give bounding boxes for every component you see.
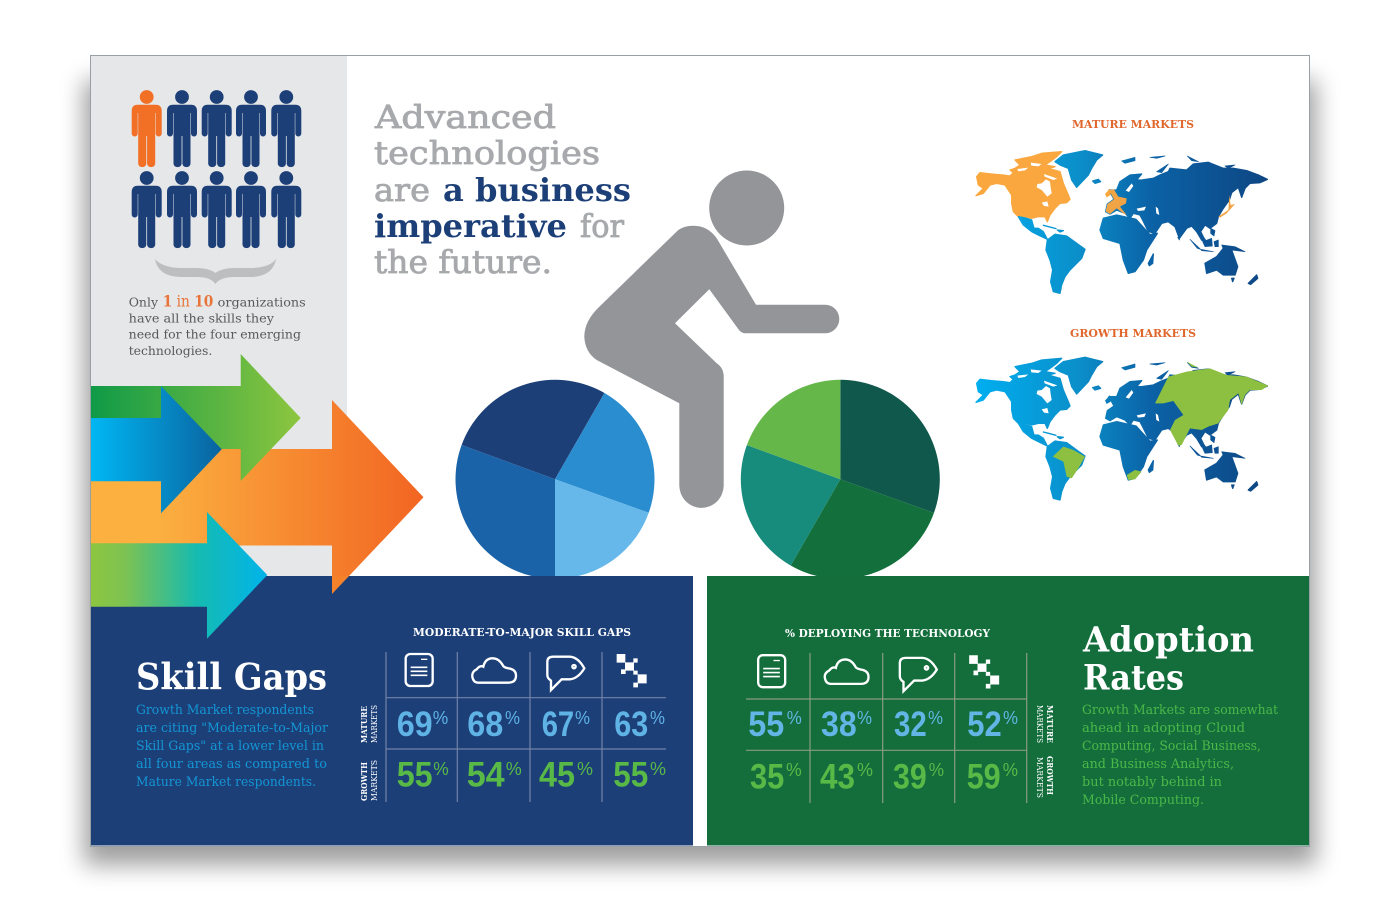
stats: mature markets skill gaps: 67 [542,705,574,744]
panel: grey sidebar [91,56,347,576]
text block: 1 in 10: have all the skills they [129,310,275,326]
arrow: blue [91,386,222,513]
text block: 1 in 10: organizations [218,295,306,310]
icon: cyclist [584,170,839,508]
heading: main headline: the future. [374,243,552,281]
chart title: deployment table: % DEPLOYING THE TECHNOLOGY [785,626,991,640]
heading: growth markets: GROWTH MARKETS [1070,326,1196,340]
stats: mature markets deployment: 55 [748,705,784,744]
stats: mature markets deployment: % [928,708,943,728]
table grid: skill gaps [386,652,666,802]
arrow: orange head over panel [332,576,349,594]
stats: mature markets deployment: % [857,708,872,728]
highlight: Russia, China, India [1155,362,1268,446]
heading: adoption rates: Rates [1083,658,1184,698]
panel: skill gaps [91,576,693,846]
arrow: teal [91,512,267,639]
highlight: Brazil [1053,447,1085,478]
highlight: Japan [1218,195,1235,218]
text block: 1 in 10: Only [129,295,159,310]
stats: growth markets skill gaps: 45 [539,756,575,795]
row labels: deployment: GROWTH [1044,756,1054,795]
highlight: Europe [1106,189,1127,215]
text block: 1 in 10: technologies. [129,343,212,358]
stats: growth markets deployment: % [1003,760,1018,780]
arrow: orange [91,400,424,594]
stats: mature markets deployment: % [787,708,802,728]
stats: growth markets deployment: % [929,760,944,780]
stats: mature markets skill gaps [397,705,665,744]
text block: adoption body [1082,703,1279,808]
row labels: skill gaps [360,705,380,801]
icons: technology row [758,655,999,691]
text block: skill gaps body: all four areas as compared to [136,757,327,772]
stats: mature markets skill gaps: % [650,708,665,728]
stats: growth markets skill gaps [397,756,666,795]
icon: brace [155,259,276,284]
stats: growth markets deployment: % [786,760,802,780]
row labels: deployment: MARKETS [1034,757,1044,798]
text block: 1 in 10: 1 in 10 [163,292,213,311]
chart title: skill gaps table: MODERATE-TO-MAJOR SKILL GAPS [413,625,631,639]
text block: adoption body: Growth Markets are somewhat [1082,703,1279,718]
stats: mature markets skill gaps: % [433,708,448,728]
row labels: skill gaps: GROWTH [360,762,370,801]
text block: 1 in 10: need for the four emerging [129,326,301,342]
arrow: green top [91,354,301,481]
chart: green pie wheel [740,380,940,576]
stats: growth markets deployment: 39 [893,757,927,796]
stats: growth markets skill gaps: % [650,759,666,779]
text block: skill gaps body: Growth Market respondents [136,703,314,718]
text block: skill gaps body: Mature Market respondents. [136,775,316,790]
heading: main headline: for [580,207,625,245]
row labels: skill gaps: MATURE [360,706,370,743]
heading: adoption rates: Adoption [1082,620,1254,660]
stats: mature markets deployment: % [1003,708,1018,728]
heading: main headline: technologies [374,134,600,172]
text block: skill gaps body: are citing "Moderate-to-Major [136,721,329,736]
heading: main headline [374,98,631,281]
row labels: deployment [1034,705,1054,798]
text block: adoption body: but notably behind in [1082,775,1223,790]
stats: mature markets deployment: 52 [967,705,1002,744]
heading: main headline: are [374,171,430,209]
stats: growth markets skill gaps: % [577,759,593,779]
stats: growth markets deployment: 59 [967,757,1001,796]
text block: adoption body: Computing, Social Business, [1082,739,1261,754]
heading: skill gaps: Skill Gaps [136,656,327,698]
map: mature markets [976,151,1267,293]
stats: mature markets skill gaps: 68 [467,705,503,744]
stats: mature markets deployment [748,705,1018,744]
stats: growth markets skill gaps: % [506,759,522,779]
stats: growth markets deployment: % [857,760,873,780]
row labels: deployment: MARKETS [1034,705,1044,743]
chart: blue pie wheel [456,380,654,576]
highlight: South Africa [1127,470,1142,480]
drop shadow [84,80,1316,865]
icon: people row [132,90,301,248]
heading: main headline: a business [443,171,631,209]
stats: mature markets skill gaps: 69 [397,705,433,744]
heading: main headline: Advanced [374,98,556,136]
table grid: deployment [746,653,1027,803]
text block: adoption body: Mobile Computing. [1082,793,1204,808]
text block: 1 in 10 [129,292,306,358]
page frame [90,56,1310,846]
stats: growth markets deployment: 35 [750,757,784,796]
stats: growth markets skill gaps: % [433,759,449,779]
stats: mature markets deployment: 38 [821,705,857,744]
stats: growth markets skill gaps: 55 [397,756,433,795]
stats: mature markets deployment: 32 [894,705,927,744]
stats: growth markets deployment: 43 [820,757,855,796]
row labels: skill gaps: MARKETS [370,705,380,743]
text block: adoption body: ahead in adopting Cloud [1082,721,1245,736]
icons: technology row [406,654,647,690]
heading: main headline: imperative [374,207,567,245]
heading: adoption rates [1082,620,1254,698]
text block: skill gaps body: Skill Gaps" at a lower level in [136,739,325,754]
stats: mature markets skill gaps: % [505,708,520,728]
row labels: skill gaps: MARKETS [370,760,380,801]
stats: growth markets deployment [750,757,1018,796]
text block: adoption body: and Business Analytics, [1082,757,1234,772]
stats: growth markets skill gaps: 55 [613,756,648,795]
heading: mature markets: MATURE MARKETS [1072,117,1194,131]
row labels: deployment: MATURE [1044,705,1054,743]
stats: mature markets skill gaps: % [575,708,590,728]
stats: mature markets skill gaps: 63 [614,705,648,744]
map: growth markets [976,357,1268,500]
text block: skill gaps body [136,703,329,790]
panel: adoption rates [707,576,1309,846]
stats: growth markets skill gaps: 54 [467,756,505,795]
